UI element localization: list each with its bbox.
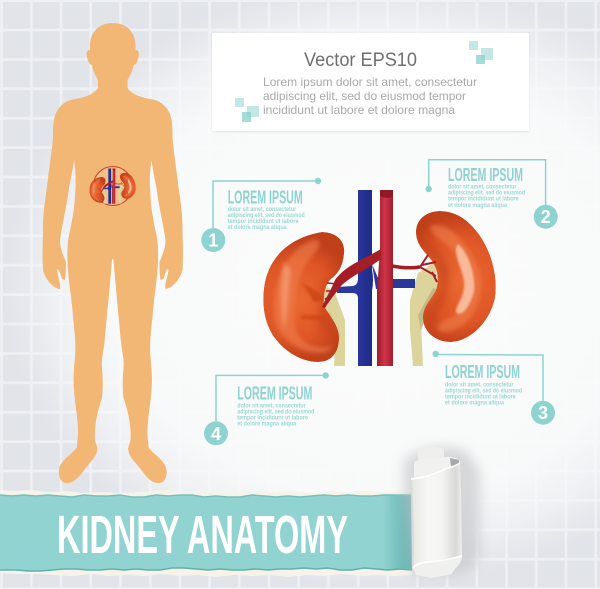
callout 1 text: tempor incididunt ut labore <box>228 218 299 225</box>
panel: intro text card <box>212 33 529 132</box>
number badge 4: 4 <box>211 424 221 444</box>
callout 2 heading: LOREM IPSUM <box>448 164 523 185</box>
callout 3 heading: LOREM IPSUM <box>445 361 520 382</box>
connector line 4 <box>216 372 329 422</box>
number badge 2: 2 <box>541 207 551 227</box>
intro paragraph: incididunt ut labore et dolore magna <box>263 103 455 117</box>
roll bottom curl <box>413 556 462 578</box>
torn paper banner <box>0 480 412 577</box>
callout 1 text <box>228 206 305 231</box>
banner title: KIDNEY ANATOMY <box>57 505 348 565</box>
connector line 1 <box>213 178 321 228</box>
callout 2 text: tempor incididunt ut labore <box>448 196 519 203</box>
callout 1 text: et dolore magna aliqua <box>228 224 287 231</box>
banner inner shade top <box>0 495 411 497</box>
callout 1 text: dolor sit amet, consectetur <box>228 206 297 213</box>
callout 1 <box>201 178 321 252</box>
callout 2 text: dolor sit amet, consectetur <box>448 184 517 191</box>
roll shadow <box>404 447 480 575</box>
small kidney inset on body <box>89 166 136 206</box>
callout 4 text: adipiscing elit, sed do eiusmod <box>237 408 314 415</box>
torn cream edges <box>0 490 412 577</box>
intro paragraph <box>263 75 477 117</box>
teal banner strip <box>0 495 412 571</box>
callout 4 text: dolor sit amet, consectetur <box>237 402 306 409</box>
white paper behind the tear <box>0 480 412 492</box>
decorative squares bottom left <box>235 98 259 122</box>
connector line 3 <box>432 351 543 401</box>
callout 2 text: adipiscing elit, sed do eiusmod <box>448 190 525 197</box>
banner inner shade bottom <box>0 568 412 571</box>
callout 4 text: et dolore magna aliqua <box>237 420 297 427</box>
callout 3 text: adipiscing elit, sed do eiusmod <box>445 387 522 394</box>
callout 2 <box>426 160 558 229</box>
callout 3 <box>432 351 555 425</box>
callout 4 text: tempor incididunt ut labore <box>237 414 308 421</box>
callout 4 text <box>237 402 314 427</box>
number badge 3: 3 <box>538 403 548 423</box>
heading: Vector EPS10: Vector EPS10 <box>304 50 417 71</box>
human body silhouette <box>43 23 183 483</box>
callout 4 <box>204 372 329 445</box>
callout 3 text: et dolore magna aliqua <box>445 400 504 407</box>
callout 3 text: tempor incididunt ut labore <box>445 393 516 400</box>
intro paragraph: adipiscing elit, sed do eiusmod tempor <box>263 89 466 103</box>
callout 1 heading: LOREM IPSUM <box>228 186 303 207</box>
paper roll <box>404 447 480 578</box>
callout 1 text: adipiscing elit, sed do eiusmod <box>228 212 305 219</box>
callout 4 heading: LOREM IPSUM <box>237 382 312 403</box>
kidney anatomy illustration <box>263 190 496 366</box>
decorative squares top right <box>469 41 493 64</box>
number badge 1: 1 <box>208 230 218 250</box>
intro paragraph: Lorem ipsum dolor sit amet, consectetur <box>263 75 477 89</box>
callout 3 text <box>445 381 522 407</box>
roll top curl <box>418 447 444 460</box>
roll body <box>412 463 462 570</box>
callout 2 text: et dolore magna aliqua <box>448 202 507 209</box>
callout 3 text: dolor sit amet, consectetur <box>445 381 514 388</box>
callout 2 text <box>448 184 525 209</box>
connector line 2 <box>426 160 546 205</box>
